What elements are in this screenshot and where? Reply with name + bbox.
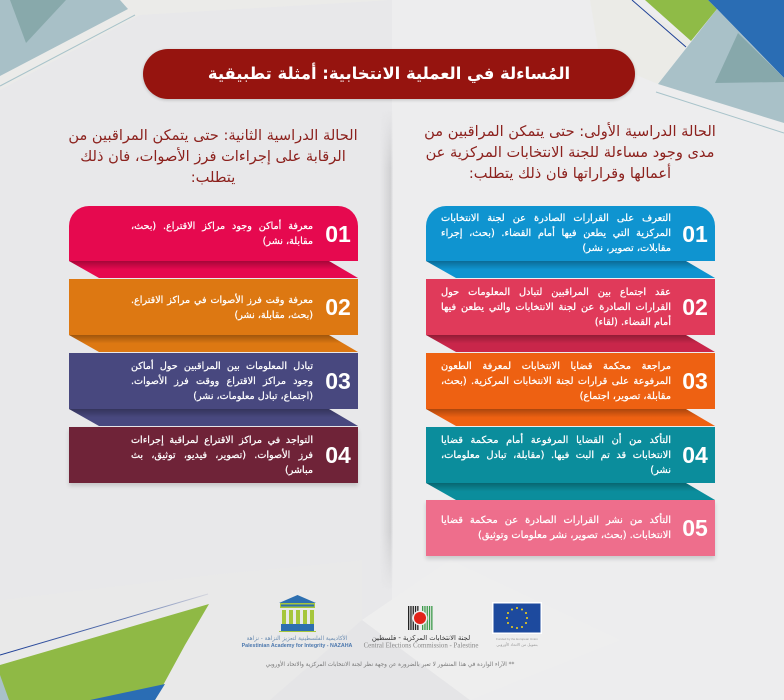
- step 03: [426, 353, 715, 409]
- step 01: معرفة أماكن وجود مراكز الاقتراع. (بحث،: [131, 221, 313, 232]
- step 04: مباشر): [285, 465, 313, 476]
- step 04: الانتخابات قد تم البت فيها. (مقابلة، تبادل معلومات،: [441, 450, 671, 461]
- step 01: [69, 206, 358, 261]
- heading: case study one: مدى وجود مساءلة للجنة الانتخابات المركزية عن: [426, 144, 714, 161]
- step 04: [69, 427, 358, 483]
- step 03: (اجتماع، تبادل معلومات، نشر): [193, 391, 313, 402]
- logo: European Union: بتمويل من الاتحاد الأوروبي: [496, 642, 538, 647]
- step 01: مقابلة، نشر): [263, 236, 313, 247]
- step 03: مراجعة محكمة قضايا الانتخابات لمعرفة الطعون: [441, 361, 671, 372]
- logo: Nazaha academy: Palestinian Academy for Integrity - NAZAHA: [242, 643, 353, 649]
- step 04: [426, 427, 715, 483]
- step 02: 02: [682, 294, 708, 320]
- heading: case study one: أعمالها وقراراتها فان ذلك يتطلب:: [469, 165, 671, 182]
- heading: case study two: الرقابة على إجراءات فرز الأصوات، فان ذلك: [80, 148, 346, 165]
- step 01: مقابلات، تصوير، نشر): [582, 243, 671, 254]
- heading: case study one: [424, 122, 716, 182]
- logo: Nazaha academy: الأكاديمية الفلسطينية لتعزيز النزاهة - نزاهة: [247, 634, 348, 642]
- step 01: [426, 206, 715, 261]
- step 02: 02: [325, 294, 351, 320]
- step 02: معرفة وقت فرز الأصوات في مراكز الاقتراع.: [131, 295, 313, 306]
- step 05: الانتخابات. (بحث، تصوير، نشر معلومات وتوثيق): [478, 530, 671, 541]
- step 03: وجود مراكز الاقتراع ووقت فرز الأصوات.: [131, 376, 313, 387]
- step 04: التواجد في مراكز الاقتراع لمراقبة إجراءات: [131, 435, 313, 446]
- step 01: 01: [325, 220, 351, 246]
- step 02: القرارات الصادرة عن لجنة الانتخابات والتي يطعن فيها: [441, 302, 671, 313]
- step 02: أمام القضاء. (لقاء): [595, 317, 671, 328]
- step 03: المرفوعة على قرارات لجنة الانتخابات المركزية. (بحث،: [441, 376, 671, 387]
- heading: case study two: [68, 127, 358, 186]
- step 02: [69, 279, 358, 335]
- logo: European Union: [492, 602, 542, 647]
- logo: Central Elections Commission: [364, 606, 478, 650]
- step 02: (بحث، مقابلة، نشر): [234, 310, 313, 321]
- step 01: المركزية التي يطعن فيها أمام القضاء. (بحث، إجراء: [441, 228, 671, 239]
- step 02: عقد اجتماع بين المراقبين لتبادل المعلومات حول: [441, 287, 671, 298]
- step 02: [426, 279, 715, 335]
- step 04: نشر): [650, 465, 671, 476]
- step 03: تبادل المعلومات بين المراقبين حول أماكن: [131, 361, 313, 372]
- footer disclaimer: ** الآراء الواردة في هذا المنشور لا تعبر بالضرورة عن وجهة نظر لجنة الانتخابات المركزية والاتحاد الأوروبي: [266, 662, 514, 668]
- ribbon folds left: [69, 261, 358, 426]
- title: المُساءلة في العملية الانتخابية: أمثلة تطبيقية: [208, 64, 570, 83]
- step 04: 04: [325, 442, 351, 468]
- panel: right column steps: [424, 206, 716, 560]
- step 03: مقابلة، تصوير، اجتماع): [580, 391, 671, 402]
- heading: case study two: الحالة الدراسية الثانية: حتى يتمكن المراقبين من: [68, 127, 358, 144]
- panel: left column steps: [68, 206, 360, 488]
- heading: case study one: الحالة الدراسية الأولى: حتى يتمكن المراقبين من: [424, 123, 716, 140]
- step 04: التأكد من أن القضايا المرفوعة أمام محكمة قضايا: [441, 435, 671, 446]
- heading: case study two: يتطلب:: [191, 169, 235, 186]
- logo: European Union: Funded by the European Union: [496, 637, 538, 641]
- step 03: [69, 353, 358, 409]
- step 05: 05: [682, 515, 708, 541]
- step 05: التأكد من نشر القرارات الصادرة عن محكمة قضايا: [441, 515, 671, 526]
- step 01: التعرف على القرارات الصادرة عن لجنة الانتخابات: [441, 213, 671, 224]
- title: [143, 49, 635, 99]
- logo: Nazaha academy: [242, 595, 353, 649]
- step 04: فرز الأصوات. (تصوير، فيديو، توثيق، بث: [131, 450, 313, 461]
- logo: Central Elections Commission: Central Elections Commission - Palestine: [364, 642, 478, 650]
- step 01: 01: [682, 220, 708, 246]
- step 04: 04: [682, 442, 708, 468]
- step 05: [426, 500, 715, 556]
- step 03: 03: [325, 368, 351, 394]
- ribbon folds right: [426, 261, 715, 500]
- step 03: 03: [682, 368, 708, 394]
- logo: Central Elections Commission: لجنة الانتخابات المركزية - فلسطين: [372, 634, 470, 642]
